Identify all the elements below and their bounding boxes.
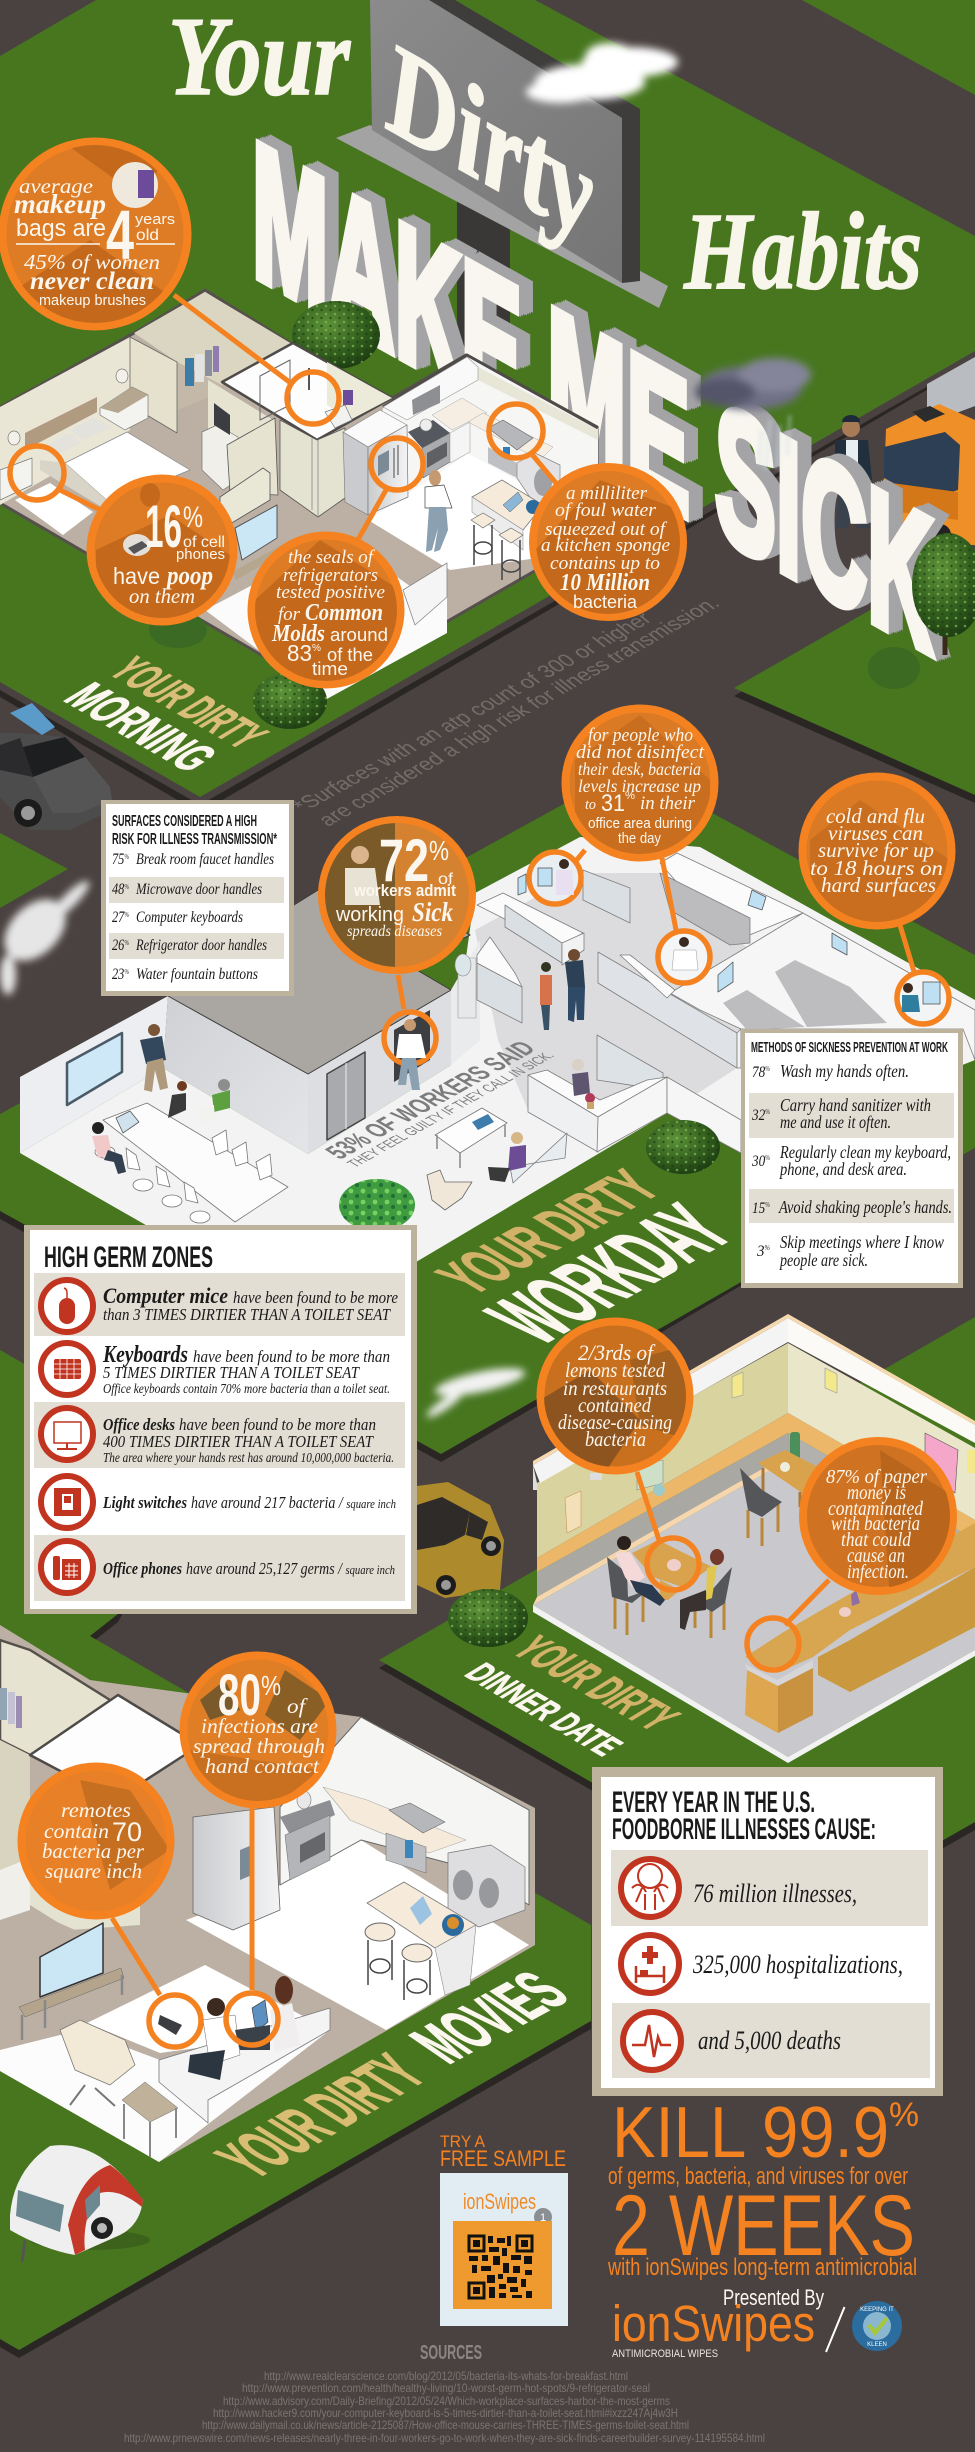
- sources: http://www.hacker9.com/your-computer-keyboard-is-5-times-dirtier-than-a-toilet-seat.html#ixzz247Aj4w3H: [213, 2406, 678, 2420]
- cloud: near restaurant: [424, 1363, 527, 1421]
- callout: hand contact: 80: [218, 1663, 261, 1728]
- callout: lemons: [540, 1322, 699, 1590]
- headline: kill 99.9%: KILL 99.9: [612, 2093, 889, 2173]
- callout: makeup bags: [0, 120, 339, 424]
- island and stools: [365, 1882, 476, 2000]
- callout: refrigerator seals: for: [278, 604, 301, 625]
- title words: MAKE ME SICK (3D): MAKE: [258, 98, 528, 464]
- callout: makeup bags: average: [19, 174, 93, 198]
- callout: refrigerator seals: [252, 438, 423, 690]
- callout: desk bacteria: their desk, bacteria: [578, 759, 701, 779]
- callout: refrigerator seals: Molds: [271, 621, 325, 647]
- panel: methods of sickness prevention: %: [765, 1244, 770, 1252]
- office building: [20, 837, 975, 1322]
- sample sachet with QR code: ionSwipes: [463, 2189, 536, 2214]
- callout: desk bacteria: in their: [640, 793, 696, 814]
- house: movies: [0, 1625, 535, 2162]
- callout: lemons: lemons tested: [565, 1358, 665, 1382]
- callout: refrigerator seals: time: [312, 659, 348, 679]
- callout: paper money: infection.: [847, 1561, 909, 1583]
- panel: foodborne illnesses: 325,000 hospitalizations,: [692, 1950, 903, 1979]
- title words: MAKE ME SICK (3D): ME: [555, 263, 698, 558]
- callout: remotes: [22, 1766, 201, 2047]
- panel: methods of sickness prevention: %: [765, 1065, 770, 1073]
- headline: kill 99.9%: %: [889, 2096, 919, 2134]
- callout: makeup bags: years: [135, 211, 175, 228]
- callout: workers admit working sick: working: [335, 904, 404, 926]
- logo: presented by ionSwipes: ANTIMICROBIAL WIPES: [612, 2348, 718, 2360]
- title words: MAKE ME SICK (3D): MAKE: [266, 95, 536, 461]
- office floor caption: 53% of workers: THEY FEEL GUILTY IF THEY CALL IN SICK.: [344, 1049, 558, 1170]
- panel: surfaces high risk: 75: [112, 851, 128, 868]
- section label: your dirty movies: YOUR DIRTY: [200, 2044, 443, 2189]
- section label: your dirty workday: WORKDAY: [464, 1191, 755, 1357]
- road footnote: *Surfaces with an atp count of 300 or higher: [288, 609, 657, 816]
- callout: desk bacteria: 31: [601, 790, 625, 817]
- callout: makeup bags: old: [136, 227, 159, 244]
- icon: office phone: [41, 1541, 93, 1593]
- section label: your dirty workday: YOUR DIRTY: [420, 1160, 676, 1304]
- callout: kitchen sponge: contains up to: [550, 553, 660, 574]
- panel: surfaces high risk: %: [124, 968, 129, 976]
- icon: storm cloud and rain: [695, 358, 811, 470]
- panel: methods of sickness prevention: 15: [752, 1200, 768, 1217]
- sample sachet with QR code: 1: [540, 2212, 546, 2224]
- panel: methods of sickness prevention: %: [765, 1108, 770, 1116]
- title words: MAKE ME SICK (3D): ME: [551, 264, 694, 559]
- panel: surfaces high risk: %: [124, 939, 129, 947]
- callout: kitchen sponge: bacteria: [573, 592, 638, 612]
- panel: high germ zones: have around 217 bacteria / square inch: [191, 1493, 396, 1512]
- icon: hospital bed: [621, 1935, 679, 1993]
- callout: kitchen sponge: [489, 404, 683, 620]
- panel: surfaces high risk: 26: [112, 937, 128, 954]
- try a free sample heading: FREE SAMPLE: [440, 2146, 566, 2171]
- title words: MAKE ME SICK (3D): ME: [559, 261, 702, 556]
- title words: MAKE ME SICK (3D): ME: [547, 264, 690, 559]
- title words: MAKE ME SICK (3D): MAKE: [260, 98, 530, 464]
- dresser and wall partitions: [202, 380, 447, 700]
- callout: refrigerator seals: around: [330, 625, 388, 645]
- section label: your dirty morning: YOUR DIRTY: [98, 650, 279, 756]
- tree: top lawn: [292, 301, 380, 369]
- title words: MAKE ME SICK (3D): MAKE: [254, 99, 524, 465]
- callout: makeup bags: makeup brushes: [39, 292, 146, 309]
- bathroom: [222, 343, 392, 440]
- section label: your dirty movies: MOVIES: [394, 1961, 585, 2074]
- living room: [0, 1923, 330, 2162]
- callout: lemons: bacteria: [585, 1427, 646, 1451]
- callout: kitchen sponge: a kitchen sponge: [541, 535, 670, 556]
- title word: Habits: Habits: [683, 190, 922, 312]
- bar with pillars: [745, 1523, 975, 1733]
- callout: desk bacteria: %: [625, 790, 635, 802]
- logo: presented by ionSwipes: Presented By: [723, 2285, 824, 2310]
- title word: Dirty: Dirty: [385, 8, 592, 273]
- panel: surfaces high risk: 48: [112, 881, 128, 898]
- callout: makeup bags: 4: [106, 196, 134, 274]
- kitchen: [330, 355, 598, 625]
- callout: cell phones: have: [113, 563, 160, 589]
- panel: methods of sickness prevention: me and use it often.: [780, 1112, 891, 1132]
- panel: high germ zones: have been found to be more than: [193, 1347, 390, 1366]
- restaurant: [533, 1314, 975, 1763]
- house: morning: [0, 290, 598, 700]
- callout: paper money: [747, 1441, 960, 1670]
- callout: cell phones: [10, 446, 234, 622]
- callout: cell phones: on them: [129, 584, 195, 608]
- callout: cell phones: poop: [165, 561, 213, 590]
- bed: [15, 397, 190, 535]
- callout: kitchen sponge: 10 Million: [560, 570, 650, 596]
- billboard sign: [336, 0, 668, 360]
- nightstands and lamps: [0, 369, 148, 500]
- callout: refrigerator seals: of the: [327, 645, 373, 665]
- callout: cold and flu: [802, 776, 952, 1024]
- callout: lemons: in restaurants: [563, 1376, 667, 1400]
- cloud: left wisp: [0, 877, 93, 995]
- bush: right plot grass: [868, 647, 920, 689]
- callout: cell phones: 16: [145, 493, 182, 560]
- trailer: [10, 2145, 150, 2262]
- title words: MAKE ME SICK (3D): ME: [549, 265, 692, 559]
- callout: cold and flu: cold and flu: [826, 804, 925, 828]
- car: black: [0, 703, 112, 830]
- panel: surfaces high risk: Refrigerator door handles: [135, 937, 267, 954]
- logo: keeping it kleen badge: KLEEN: [867, 2342, 887, 2348]
- callout: workers admit working sick: %: [429, 835, 449, 866]
- bottles and wall art: [565, 1368, 975, 1533]
- callout: lemons: 2/3rds of: [578, 1340, 656, 1365]
- title words: MAKE ME SICK (3D): MAKE: [252, 99, 522, 465]
- panel: high germ zones: have been found to be more: [233, 1288, 398, 1307]
- sources: SOURCES: [420, 2342, 482, 2364]
- panel: high germ zones: Light switches: [102, 1493, 187, 1512]
- callout: desk bacteria: for people who: [588, 725, 693, 746]
- headline: kill 99.9%: [607, 2093, 919, 2281]
- callout: cold and flu: hard surfaces: [821, 873, 936, 897]
- panel: high germ zones: 400 TIMES DIRTIER THAN A TOILET SEAT: [103, 1432, 374, 1451]
- callout: remotes: square inch: [45, 1859, 142, 1883]
- callout: desk bacteria: the day: [618, 830, 661, 847]
- sample sachet with QR code: [440, 2173, 568, 2326]
- man walking in kitchen: [425, 470, 452, 552]
- title words: MAKE ME SICK (3D): MAKE: [256, 98, 526, 464]
- logo: keeping it kleen badge: KEEPING IT: [860, 2307, 894, 2313]
- callout: desk bacteria: [529, 708, 714, 983]
- dining couple table: [607, 1536, 732, 1638]
- callout: remotes: 70: [112, 1817, 142, 1847]
- panel: high germ zones: have around 25,127 germs / square inch: [186, 1559, 395, 1578]
- callout: cold and flu: viruses can: [828, 821, 923, 845]
- delivery truck and man: [835, 357, 975, 546]
- callout: paper money: cause an: [847, 1545, 905, 1567]
- section label: your dirty dinner date: YOUR DIRTY: [501, 1629, 691, 1738]
- callout: remotes: contain: [44, 1819, 109, 1843]
- callout: paper money: that could: [841, 1529, 912, 1551]
- callout: refrigerator seals: the seals of: [288, 547, 376, 568]
- title words: MAKE ME SICK (3D): MAKE: [262, 97, 532, 463]
- callout: kitchen sponge: a milliliter: [566, 483, 648, 504]
- callout: cell phones: phones: [176, 546, 225, 563]
- callout: makeup bags: makeup: [14, 189, 106, 219]
- sources: http://www.prnewswire.com/news-releases/nearly-three-in-four-workers-go-to-work-when-they-are-sick-finds-careerbuilder-survey-114195584.html: [124, 2431, 765, 2445]
- sources: http://www.advisory.com/Daily-Briefing/2012/05/24/Which-workplace-surfaces-harbor-the-most-germs: [223, 2394, 670, 2408]
- callout: cold and flu: to 18 hours on: [810, 856, 943, 880]
- panel: high germ zones: Office phones: [103, 1559, 182, 1578]
- back table and chair: [740, 1450, 818, 1546]
- panel: methods of sickness prevention: people are sick.: [778, 1250, 868, 1270]
- car: yellow: [417, 1482, 504, 1598]
- panel: methods of sickness prevention: %: [765, 1154, 770, 1162]
- title words: MAKE ME SICK (3D): ME: [557, 262, 700, 557]
- bush: dinner: [448, 1589, 528, 1647]
- title words: MAKE ME SICK (3D): ME: [553, 263, 696, 558]
- panel: methods of sickness prevention: 32: [752, 1107, 768, 1124]
- callout: cold and flu: survive for up: [818, 838, 934, 862]
- cubicles: [477, 853, 975, 1183]
- callout: lemons: disease-causing: [558, 1410, 672, 1434]
- callout: makeup bags: 45% of women: [24, 250, 160, 274]
- panel: methods of sickness prevention: 30: [752, 1153, 768, 1170]
- panel: foodborne illnesses: 76 million illnesses,: [693, 1879, 857, 1908]
- callout: remotes: remotes: [61, 1798, 131, 1822]
- panel: surfaces high risk: Microwave door handles: [135, 881, 262, 898]
- panel: methods of sickness prevention: 3: [757, 1243, 765, 1260]
- panel: methods of sickness prevention: Carry hand sanitizer with: [780, 1095, 931, 1115]
- callout: remotes: bacteria per: [42, 1839, 145, 1863]
- try a free sample heading: TRY A: [440, 2132, 486, 2151]
- panel: methods of sickness prevention: %: [765, 1201, 770, 1209]
- callout: paper money: money is: [847, 1482, 906, 1504]
- panel: surfaces high risk: %: [124, 853, 129, 861]
- panel: high germ zones: have been found to be more than: [179, 1415, 376, 1434]
- section label: your dirty dinner date: DINNER DATE: [455, 1658, 631, 1762]
- panel: methods of sickness prevention: 78: [752, 1064, 768, 1081]
- callout: lemons: contained: [578, 1393, 651, 1417]
- callout: paper money: with bacteria: [831, 1513, 920, 1535]
- road footnote: are considered a high risk for illness transmission.: [313, 593, 725, 830]
- panel: surfaces high risk: 23: [112, 966, 128, 983]
- panel: methods of sickness prevention: phone, and desk area.: [778, 1159, 907, 1179]
- callout: makeup bags: never clean: [30, 268, 154, 295]
- panel: methods of sickness prevention: Wash my hands often.: [780, 1061, 909, 1081]
- callout: workers admit working sick: spreads diseases: [347, 923, 442, 940]
- callout: workers admit working sick: [320, 820, 475, 1090]
- sources: http://www.realclearscience.com/blog/2012/05/bacteria-its-whats-for-breakfast.html: [264, 2369, 628, 2383]
- office floor caption: 53% of workers: 53% OF WORKERS SAID: [318, 1037, 542, 1163]
- desk monitors: [518, 874, 847, 992]
- panel: high germ zones: Computer mice: [103, 1283, 228, 1308]
- title words: MAKE ME SICK (3D): ME: [561, 260, 704, 555]
- conference people: [92, 1024, 230, 1174]
- panel: high germ zones: Office keyboards contain 70% more bacteria than a toilet seat.: [103, 1381, 390, 1396]
- conference table: [95, 1103, 288, 1223]
- tree right of SICK: [912, 533, 975, 655]
- try a free sample heading: [440, 2132, 566, 2171]
- icon: heartbeat: [623, 2012, 681, 2070]
- callout: desk bacteria: levels increase up: [578, 776, 701, 796]
- panel: methods of sickness prevention: [741, 1029, 963, 1288]
- logo: keeping it kleen badge: [852, 2301, 902, 2351]
- bush: morning grass: [149, 612, 207, 648]
- panel: surfaces high risk: SURFACES CONSIDERED A HIGH: [112, 813, 257, 830]
- counter along walls: [533, 1413, 975, 1605]
- icon: keyboard: [41, 1343, 93, 1395]
- callout: hand contact: infections are: [201, 1714, 318, 1738]
- panel: surfaces high risk: Water fountain buttons: [136, 966, 258, 983]
- icon: light switch: [41, 1476, 93, 1528]
- sources: [124, 2342, 765, 2445]
- title words: MAKE ME SICK (3D): MAKE: [264, 96, 534, 462]
- panel: high germ zones: 5 TIMES DIRTIER THAN A TOILET SEAT: [103, 1363, 360, 1382]
- panel: foodborne illnesses: and 5,000 deaths: [698, 2026, 841, 2055]
- callout: workers admit working sick: Sick: [412, 897, 453, 927]
- callout: hand contact: of: [287, 1694, 308, 1718]
- section label: your dirty morning: [52, 650, 279, 779]
- panel: high germ zones: [24, 1225, 417, 1614]
- callout: hand contact: [184, 1656, 332, 2045]
- callout: hand contact: %: [261, 1670, 281, 1701]
- panel: high germ zones: HIGH GERM ZONES: [44, 1241, 213, 1274]
- callout: hand contact: hand contact: [205, 1754, 320, 1778]
- panel: foodborne illnesses: [592, 1767, 943, 2096]
- office floor caption: 53% of workers: [318, 1037, 558, 1170]
- callout: refrigerator seals: refrigerators: [283, 565, 378, 586]
- callout: hand contact: spread through: [193, 1734, 325, 1758]
- logo: presented by ionSwipes: [612, 2285, 902, 2360]
- panel: high germ zones: Office desks: [103, 1415, 175, 1434]
- callout: refrigerator seals: tested positive: [276, 582, 385, 603]
- panel: surfaces high risk: %: [124, 883, 129, 891]
- sources: http://www.prevention.com/health/healthy-living/10-worst-germ-hot-spots/9-refrigerator-seal: [242, 2381, 650, 2395]
- office workers: [427, 949, 595, 1210]
- icon: white cloud over sign: [526, 43, 678, 103]
- callout: workers admit working sick: workers admit: [353, 881, 456, 900]
- callout: paper money: 87% of paper: [826, 1466, 927, 1488]
- callout: desk bacteria: to: [585, 797, 596, 813]
- callout: desk bacteria: did not disinfect: [576, 742, 705, 763]
- icon: monitor: [41, 1408, 93, 1460]
- callout: desk bacteria: office area during: [588, 815, 692, 832]
- panel: foodborne illnesses: EVERY YEAR IN THE U.S.: [612, 1786, 815, 1819]
- panel: high germ zones: Keyboards: [102, 1342, 188, 1368]
- callout: cell phones: of cell: [183, 534, 225, 551]
- callout: refrigerator seals: 83: [287, 640, 312, 666]
- icon: computer mouse: [41, 1280, 93, 1332]
- panel: methods of sickness prevention: Skip meetings where I know: [780, 1232, 944, 1252]
- sources: http://www.dailymail.co.uk/news/article-2125087/How-office-mouse-carries-THREE-TIMES-germs-toilet-seat.html: [202, 2418, 689, 2432]
- callout: cell phones: %: [183, 501, 203, 534]
- bush: morning: [253, 673, 327, 729]
- panel: surfaces high risk: [101, 800, 294, 996]
- panel: high germ zones: The area where your hands rest has around 10,000,000 bacteria.: [103, 1450, 394, 1465]
- callout: makeup bags: bags are: [16, 215, 106, 242]
- section label: your dirty morning: MORNING: [52, 675, 230, 779]
- callout: workers admit working sick: 72: [379, 827, 429, 894]
- icon: sick face: [621, 1859, 679, 1917]
- callout: paper money: contaminated: [828, 1498, 924, 1520]
- bush: office leafy shrub: [339, 1179, 415, 1231]
- couple on sofa: [158, 1976, 300, 2080]
- callout: kitchen sponge: squeezed out of: [545, 519, 668, 540]
- panel: high germ zones: than 3 TIMES DIRTIER THAN A TOILET SEAT: [103, 1305, 391, 1324]
- section label: your dirty workday: [420, 1160, 755, 1357]
- panel: surfaces high risk: RISK FOR ILLNESS TRANSMISSION*: [112, 831, 277, 848]
- section label: your dirty dinner date: [455, 1629, 691, 1762]
- callout: refrigerator seals: Common: [305, 600, 383, 626]
- logo: presented by ionSwipes: ionSwipes: [612, 2295, 815, 2352]
- man in elevator: [396, 1019, 426, 1090]
- bush: office: [646, 1120, 720, 1174]
- panel: surfaces high risk: Computer keyboards: [136, 909, 243, 926]
- callout: workers admit working sick: of: [438, 871, 454, 888]
- panel: surfaces high risk: %: [124, 911, 129, 919]
- panel: surfaces high risk: 27: [112, 909, 128, 926]
- panel: surfaces high risk: Break room faucet handles: [136, 851, 274, 868]
- callout: refrigerator seals: %: [312, 643, 321, 654]
- callout: kitchen sponge: of foul water: [555, 500, 657, 521]
